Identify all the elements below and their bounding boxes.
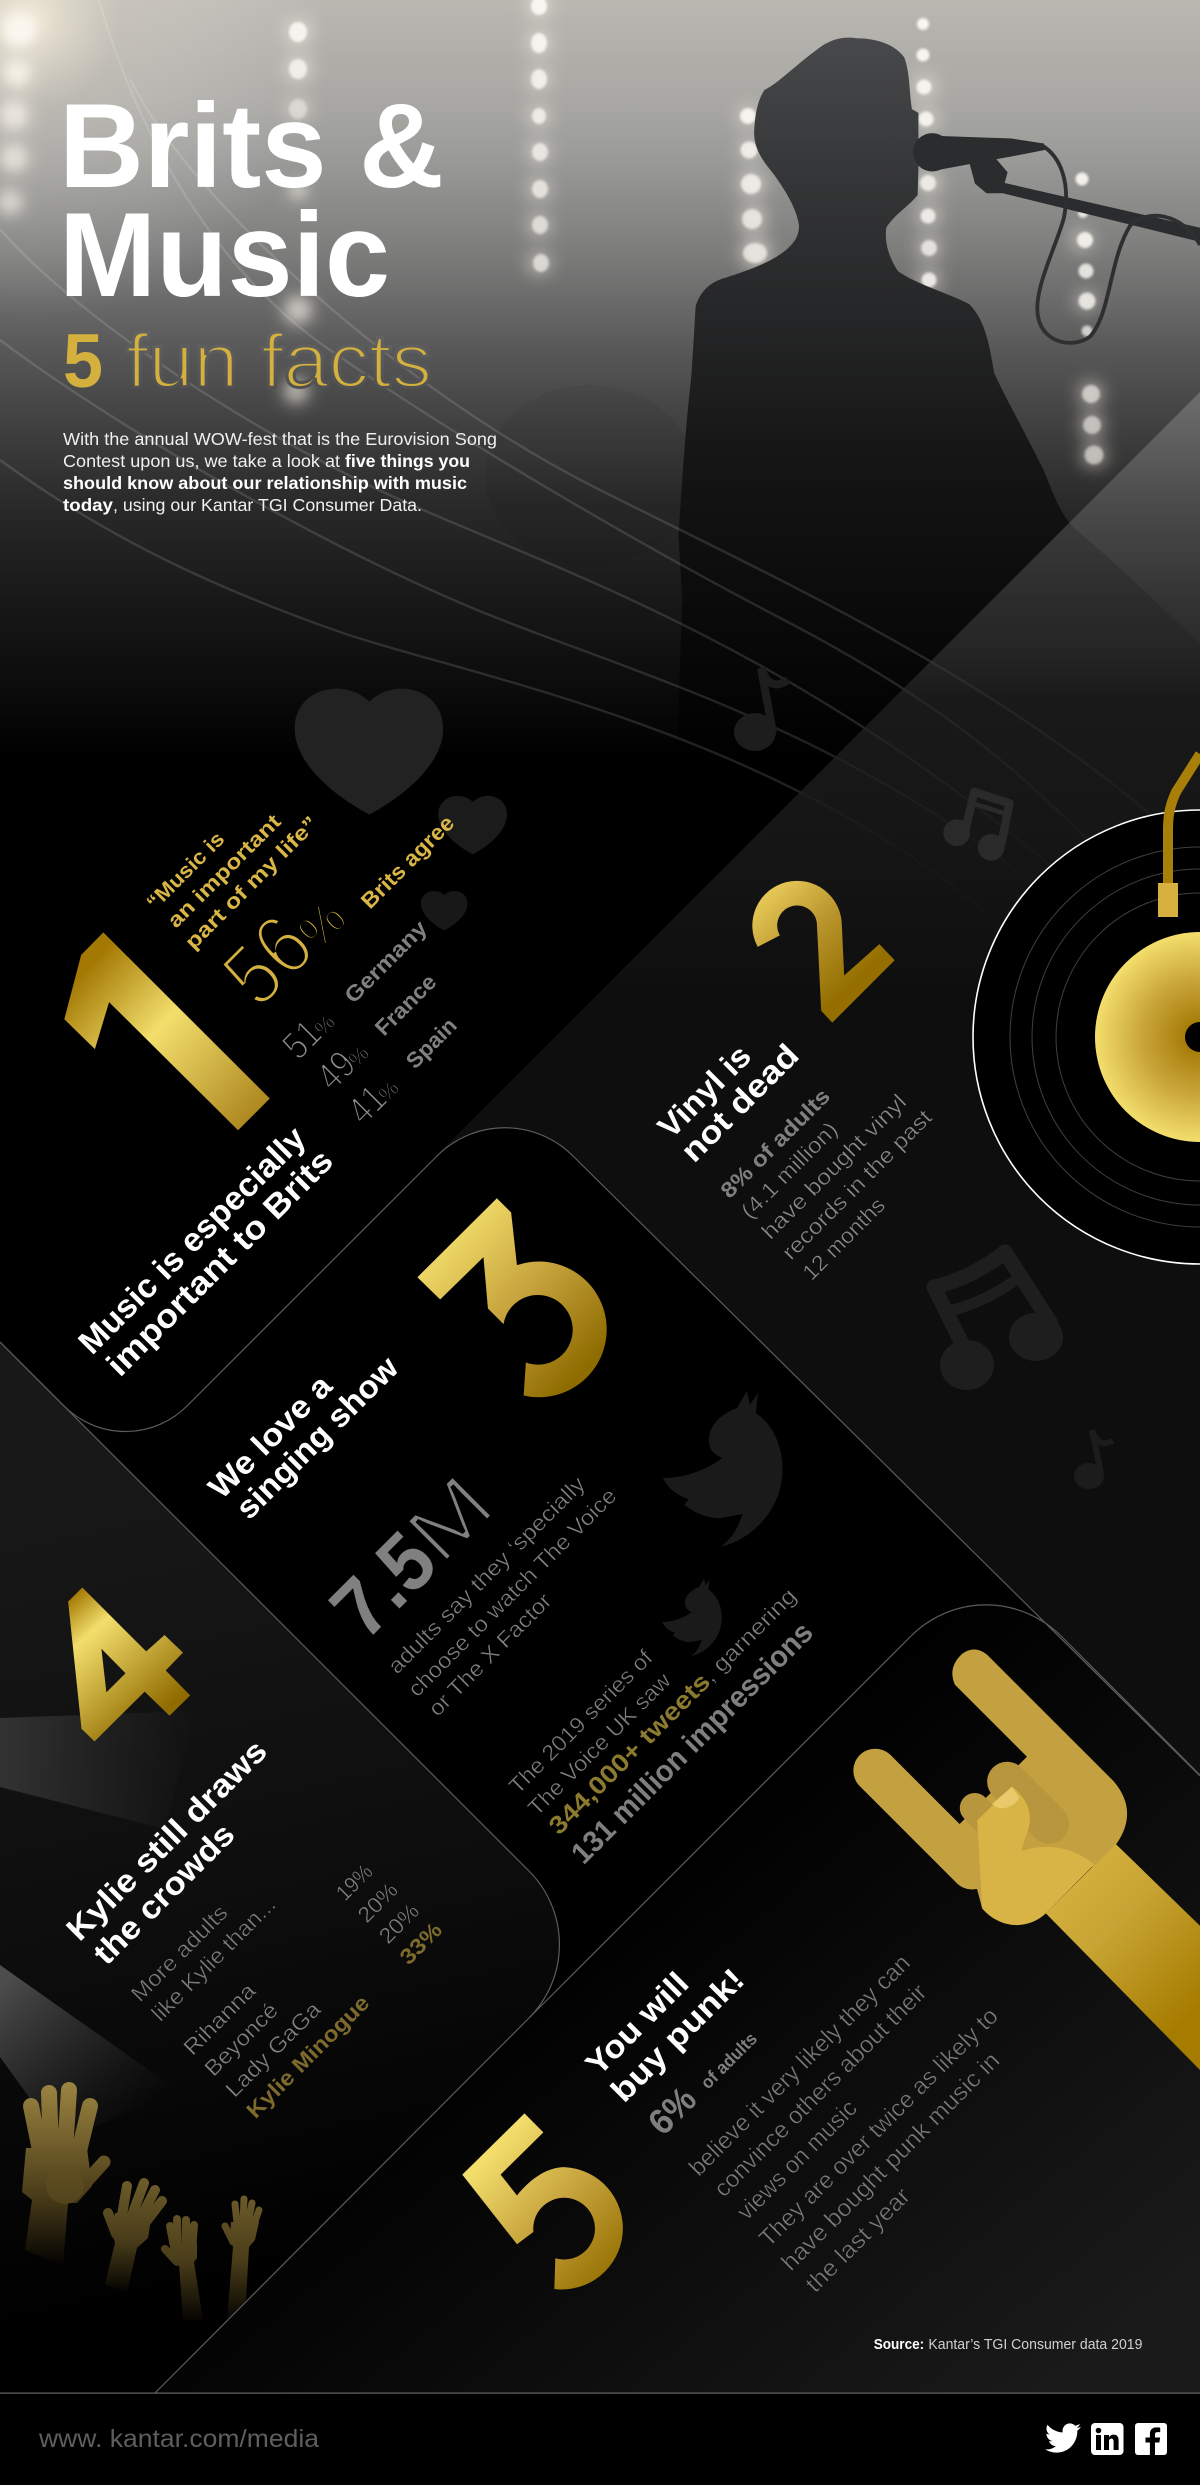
artist comparison: Rihanna bbox=[178, 1977, 261, 2060]
number 3 bbox=[417, 1198, 607, 1397]
stat description bbox=[383, 1471, 621, 1721]
body text: 12 months bbox=[797, 1192, 890, 1285]
icon: facebook bbox=[1135, 2423, 1167, 2455]
heading: important to Brits bbox=[99, 1142, 340, 1383]
stat 7.5M: M bbox=[389, 1458, 511, 1580]
country comparison: France bbox=[370, 969, 441, 1041]
title bbox=[59, 79, 444, 322]
stat 6% of adults: of adults bbox=[697, 2028, 761, 2093]
website url: www. kantar.com/media bbox=[38, 2425, 319, 2453]
body text bbox=[715, 1084, 937, 1285]
panel: Kylie background bbox=[0, 1342, 559, 2393]
panel outlines bbox=[0, 1128, 1200, 2393]
singer silhouette with microphone stand bbox=[677, 38, 1200, 765]
intro paragraph: today bbox=[63, 495, 113, 515]
panel: fact 2 bbox=[650, 881, 937, 1285]
body text: have bought punk music in bbox=[776, 2047, 1005, 2276]
microphone bbox=[913, 133, 1200, 242]
stat 7.5M: 7.5 bbox=[314, 1515, 454, 1655]
heading: Music is especially bbox=[71, 1119, 313, 1361]
title: Music bbox=[59, 188, 390, 322]
stat description: adults say they ‘specially bbox=[383, 1471, 590, 1679]
icon: linkedin bbox=[1091, 2423, 1124, 2455]
spotlight beam upper bbox=[0, 1711, 195, 1829]
body text: (4.1 million) bbox=[736, 1117, 843, 1224]
stat 56% Brits agree: Brits agree bbox=[356, 810, 459, 914]
tweets stat text: The Voice UK saw bbox=[523, 1668, 676, 1821]
icon: double music note bbox=[943, 792, 1009, 861]
panel: fact 1 bbox=[64, 689, 507, 1383]
stage lights: blurred left columns bbox=[0, 15, 309, 401]
body text: the last year bbox=[800, 2183, 916, 2298]
body text: 8% of adults bbox=[715, 1084, 835, 1203]
photo background: singer on stage bbox=[0, 0, 1200, 760]
icon: raised hands crowd bbox=[22, 2090, 259, 2320]
heading: buy punk! bbox=[603, 1961, 751, 2109]
artist comparison: Beyoncé bbox=[199, 1998, 283, 2081]
tonearm bbox=[1168, 754, 1200, 884]
stat 56% Brits agree: 56 bbox=[204, 896, 332, 1024]
number 4 bbox=[68, 1588, 190, 1741]
country comparison: Germany bbox=[339, 915, 433, 1008]
hand three bbox=[165, 2219, 203, 2320]
quote text: part of my life” bbox=[181, 812, 323, 954]
quote text: an important bbox=[163, 810, 286, 933]
source note: Kantar’s TGI Consumer data 2019 bbox=[928, 2337, 1142, 2353]
artist comparison: Kylie Minogue bbox=[241, 1990, 374, 2123]
stat 7.5M bbox=[314, 1458, 511, 1655]
body text: believe it very likely they can bbox=[684, 1950, 916, 2182]
number 5 bbox=[462, 2113, 623, 2289]
stat description: or The X Factor bbox=[423, 1588, 556, 1721]
artist comparison: 20% bbox=[353, 1877, 403, 1928]
body text: views on music bbox=[732, 2095, 863, 2226]
stat 56% Brits agree: % bbox=[288, 891, 357, 960]
spotlight beam lower bbox=[0, 1965, 180, 2140]
heading: We love a bbox=[201, 1367, 339, 1505]
icon: twitter bird small bbox=[662, 1579, 722, 1656]
large hand bbox=[22, 2090, 104, 2266]
quote text bbox=[142, 810, 323, 954]
number 1 bbox=[64, 932, 270, 1130]
body text bbox=[684, 1950, 1005, 2298]
icon: twitter bbox=[1045, 2423, 1081, 2453]
country comparison bbox=[274, 915, 462, 1133]
icon: small music note right bbox=[1074, 1430, 1113, 1489]
panel: fact 5 bbox=[462, 1649, 1200, 2353]
icon: hearts bbox=[295, 689, 507, 931]
quote text: “Music is bbox=[142, 828, 229, 915]
tweets stat text: , garnering bbox=[697, 1583, 801, 1687]
stage lights: core dots bbox=[289, 0, 1104, 464]
icon: vinyl record bbox=[973, 754, 1200, 1264]
tweets stat text: 344,000+ tweets bbox=[543, 1668, 716, 1840]
intro text: More adults bbox=[126, 1900, 233, 2007]
icon: twitter bird large bbox=[663, 1391, 783, 1546]
heading: Vinyl is bbox=[650, 1037, 758, 1145]
country comparison: 41 bbox=[339, 1077, 395, 1133]
country comparison: Spain bbox=[401, 1013, 462, 1074]
subtitle: fun facts bbox=[126, 319, 432, 404]
hand four bbox=[225, 2199, 259, 2320]
icon: large double music note bbox=[934, 1252, 1063, 1390]
stat 6% of adults bbox=[640, 2028, 761, 2143]
tweets stat text: 131 million impressions bbox=[565, 1616, 820, 1870]
intro paragraph bbox=[63, 429, 497, 515]
number 2 bbox=[752, 881, 895, 1023]
intro text: like Kylie than... bbox=[146, 1892, 281, 2026]
hand two bbox=[105, 2183, 162, 2292]
country comparison: 49 bbox=[308, 1043, 364, 1099]
heading: You will bbox=[578, 1965, 696, 2082]
panel: singing show black band bbox=[0, 1128, 1200, 2393]
panel: fact 3 bbox=[201, 1198, 820, 1870]
country comparison: % bbox=[374, 1077, 404, 1107]
subtitle: 5 bbox=[63, 319, 103, 404]
tweets stat text: The 2019 series of bbox=[504, 1644, 658, 1799]
stat 6% of adults: 6% bbox=[640, 2078, 704, 2143]
intro paragraph: should know about our relationship with music bbox=[63, 473, 467, 493]
icon: single music note dark bbox=[734, 668, 788, 751]
music staff lines bbox=[0, 0, 1180, 926]
country comparison: 51 bbox=[274, 1012, 330, 1068]
heading bbox=[650, 1037, 806, 1169]
stat 56% Brits agree bbox=[204, 810, 459, 1024]
stat description: choose to watch The Voice bbox=[403, 1483, 621, 1702]
artist comparison: 33% bbox=[395, 1917, 447, 1970]
icon: rock hand bbox=[875, 1649, 1200, 2070]
artist comparison: Lady GaGa bbox=[220, 1996, 326, 2102]
source note: Source: bbox=[874, 2337, 924, 2353]
intro paragraph: five things you bbox=[345, 451, 470, 471]
heading: singing show bbox=[228, 1349, 405, 1526]
artist comparison: 20% bbox=[374, 1898, 424, 1949]
heading: not dead bbox=[673, 1037, 806, 1169]
intro paragraph: , using our Kantar TGI Consumer Data. bbox=[113, 495, 422, 515]
intro paragraph: Contest upon us, we take a look at bbox=[63, 451, 340, 471]
body text: records in the past bbox=[777, 1105, 937, 1265]
panel: punk background bbox=[155, 1605, 1200, 2393]
footer bbox=[0, 2392, 1200, 2485]
heading: Kylie still draws bbox=[59, 1732, 274, 1947]
artist comparison bbox=[178, 1859, 447, 2123]
body text: They are over twice as likely to bbox=[754, 2003, 1004, 2252]
body text: have bought vinyl bbox=[756, 1089, 911, 1244]
tonearm cartridge bbox=[1158, 883, 1178, 917]
panel: fact 4 bbox=[22, 1588, 447, 2320]
microphone cable bbox=[1037, 145, 1200, 343]
intro paragraph: With the annual WOW-fest that is the Eurovision Song bbox=[63, 429, 497, 449]
country comparison: % bbox=[344, 1042, 374, 1072]
heading bbox=[578, 1961, 751, 2109]
panel: vinyl band background bbox=[430, 392, 1200, 1776]
title: Brits & bbox=[59, 79, 444, 213]
artist comparison: 19% bbox=[331, 1859, 378, 1906]
stage lights glow bbox=[0, 0, 1105, 466]
body text: convince others about their bbox=[709, 1979, 932, 2202]
country comparison: % bbox=[310, 1011, 340, 1041]
heading: the crowds bbox=[86, 1816, 242, 1971]
